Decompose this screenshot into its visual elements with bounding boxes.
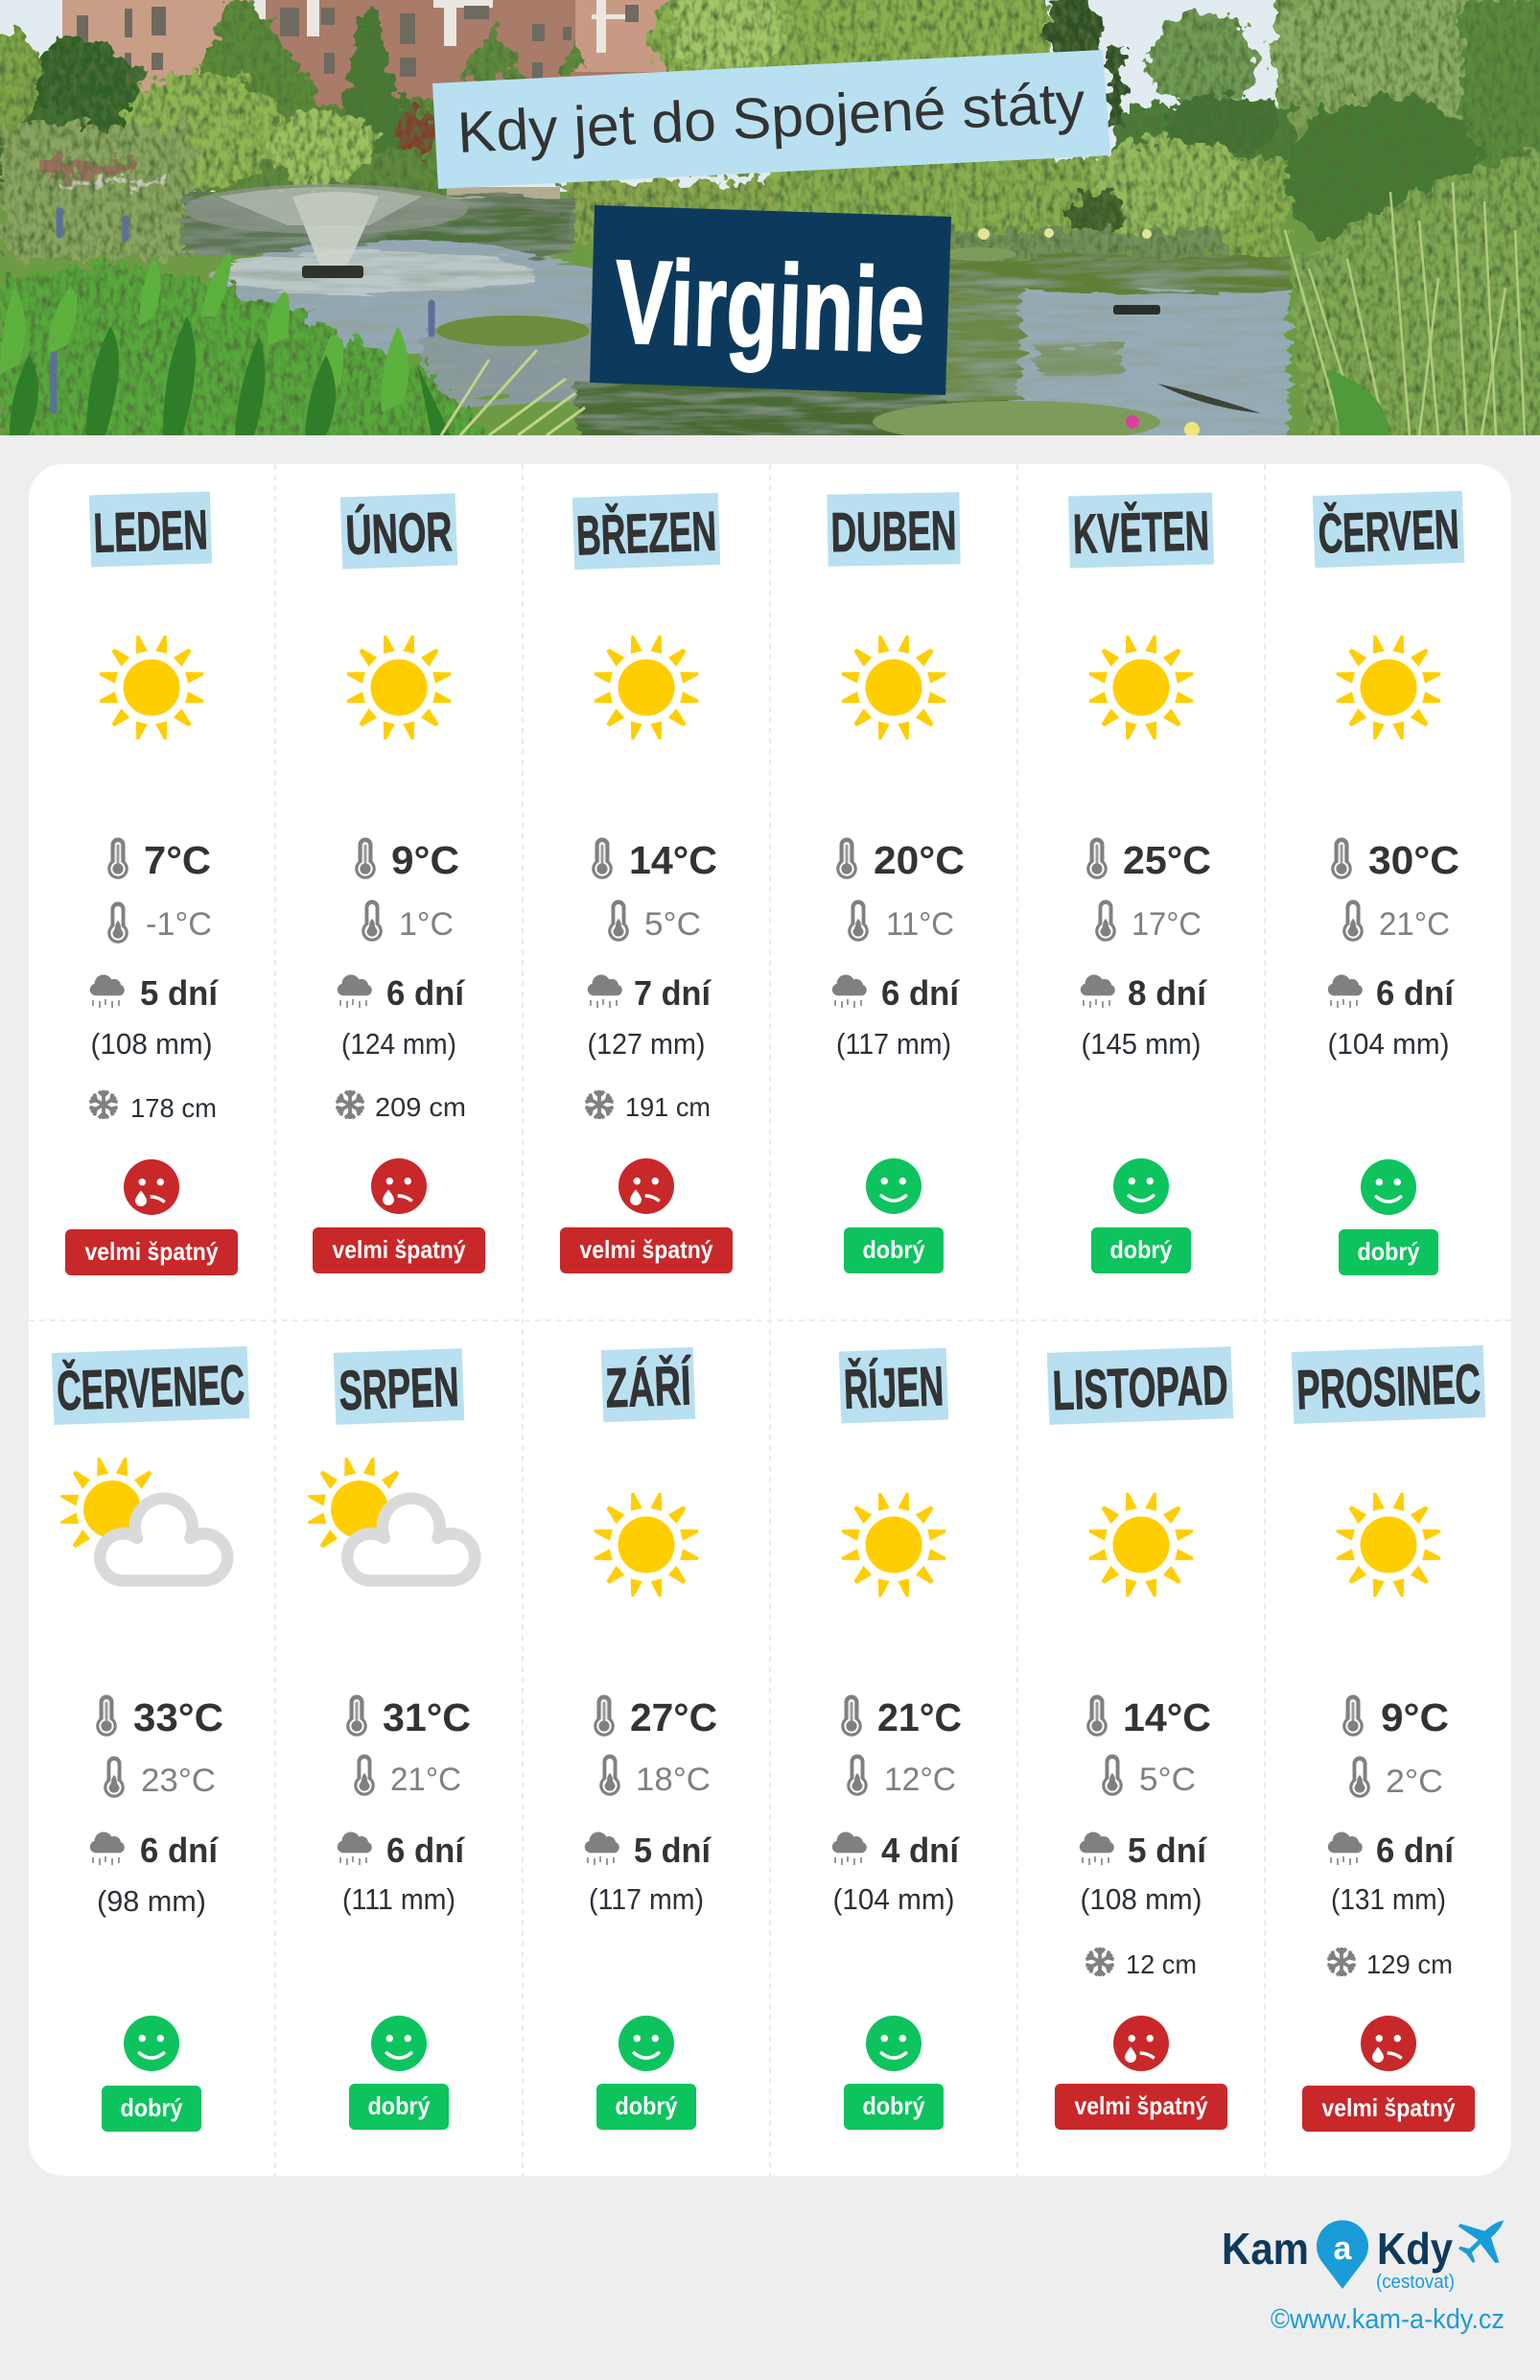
logo: Kam a Kdy: Kam xyxy=(1222,2224,1309,2274)
high temperature: 30°C xyxy=(1368,838,1459,882)
month: říjen xyxy=(832,1348,962,2130)
rating badge: dobrý xyxy=(1358,1237,1420,1266)
snowfall xyxy=(585,1090,711,1122)
month: leden xyxy=(65,492,238,1275)
month label: ČERVENEC xyxy=(56,1354,245,1422)
low temperature xyxy=(1342,899,1450,943)
icon: happy face xyxy=(371,2016,427,2071)
title banner: Kdy jet do Spojené státy xyxy=(455,70,1086,165)
low temperature xyxy=(1349,1757,1443,1800)
calendar panel xyxy=(29,464,1511,2176)
icon: sad face xyxy=(1361,2016,1416,2071)
low temperature: 21°C xyxy=(1379,906,1450,943)
low temperature: -1°C xyxy=(146,906,212,943)
month label xyxy=(601,1347,695,1422)
precipitation: (124 mm) xyxy=(341,1027,456,1061)
high temperature: 20°C xyxy=(874,838,965,882)
rainy days: 5 dní xyxy=(1128,1831,1207,1870)
high temperature: 27°C xyxy=(630,1695,717,1739)
rainy days xyxy=(90,973,219,1013)
snowfall: 191 cm xyxy=(625,1092,711,1122)
high temperature xyxy=(355,838,459,882)
high temperature: 9°C xyxy=(391,838,459,882)
rainy days xyxy=(338,973,465,1013)
low temperature: 5°C xyxy=(644,906,701,943)
month label xyxy=(340,493,457,570)
icon: sun xyxy=(1337,1493,1440,1597)
high temperature xyxy=(1086,1695,1211,1739)
rainy days xyxy=(1081,973,1207,1013)
pond water xyxy=(182,197,1290,441)
rainy days: 4 dní xyxy=(881,1831,960,1870)
rainy days: 5 dní xyxy=(634,1831,712,1870)
header photo: pond with fountains in a park xyxy=(0,0,1540,443)
rating badge xyxy=(844,2084,944,2130)
rainy days xyxy=(1080,1831,1207,1870)
month label: LISTOPAD xyxy=(1052,1354,1229,1422)
website credit: ©www.kam-a-kdy.cz xyxy=(1271,2304,1505,2335)
precipitation: (117 mm) xyxy=(589,1882,704,1916)
rating badge: dobrý xyxy=(616,2091,678,2120)
low temperature xyxy=(848,899,954,943)
month label xyxy=(89,492,212,567)
rating badge xyxy=(65,1229,238,1275)
icon: happy face xyxy=(1113,1158,1169,1214)
precipitation: (108 mm) xyxy=(1080,1882,1202,1916)
rating badge xyxy=(313,1227,485,1273)
month: září xyxy=(585,1347,717,2130)
low temperature xyxy=(599,1755,711,1798)
high temperature: 25°C xyxy=(1123,838,1211,882)
high temperature: 14°C xyxy=(1123,1695,1211,1739)
icon: sad face xyxy=(1113,2016,1169,2071)
icon: sun xyxy=(1337,636,1440,739)
rating badge xyxy=(1055,2084,1227,2130)
high temperature xyxy=(346,1695,471,1739)
rating badge xyxy=(844,1227,944,1273)
high temperature xyxy=(592,838,717,882)
month: květen xyxy=(1068,493,1214,1273)
icon: map pin: a xyxy=(1334,2230,1353,2267)
rainy days xyxy=(832,1831,960,1870)
month label: DUBEN xyxy=(830,500,957,564)
precipitation: (104 mm) xyxy=(1327,1027,1450,1061)
snowfall: 12 cm xyxy=(1126,1949,1197,1979)
rainy days: 6 dní xyxy=(1376,1831,1455,1870)
high temperature xyxy=(1331,838,1459,882)
month label: BŘEZEN xyxy=(575,500,717,568)
low temperature: 23°C xyxy=(141,1762,216,1799)
rainy days: 6 dní xyxy=(1376,973,1455,1013)
icon: sun xyxy=(595,636,698,739)
logo: Kam a Kdy: (cestovat) xyxy=(1376,2272,1455,2293)
rating badge: dobrý xyxy=(1110,1235,1173,1264)
month label xyxy=(827,492,961,567)
rainy days xyxy=(588,973,712,1013)
month label xyxy=(1068,493,1214,568)
rating badge: velmi špatný xyxy=(579,1235,713,1264)
rating badge: dobrý xyxy=(863,2091,925,2120)
high temperature: 33°C xyxy=(133,1695,223,1739)
rating badge: dobrý xyxy=(863,1235,925,1264)
blue flower spikes xyxy=(54,211,432,410)
high temperature xyxy=(836,838,965,882)
icon: sun xyxy=(100,636,203,739)
icon: happy face xyxy=(618,2016,674,2071)
high temperature xyxy=(1342,1695,1449,1739)
high temperature: 31°C xyxy=(383,1695,471,1739)
precipitation: (127 mm) xyxy=(587,1027,706,1061)
title banner xyxy=(432,50,1110,189)
month: červenec xyxy=(52,1346,249,2132)
month: listopad xyxy=(1047,1346,1233,2130)
low temperature: 11°C xyxy=(886,906,954,943)
rating badge: dobrý xyxy=(121,2093,183,2122)
logo: Kam a Kdy: Kdy xyxy=(1377,2224,1453,2274)
low temperature: 21°C xyxy=(390,1762,461,1798)
rating badge xyxy=(102,2086,201,2132)
precipitation: (98 mm) xyxy=(97,1884,206,1918)
low temperature: 17°C xyxy=(1132,906,1202,943)
snowfall xyxy=(89,1090,217,1123)
high temperature: 21°C xyxy=(877,1695,962,1739)
month label: ÚNOR xyxy=(344,501,454,567)
low temperature xyxy=(847,1755,956,1798)
month label xyxy=(334,1348,464,1425)
icon: airplane xyxy=(1458,2220,1504,2263)
high temperature xyxy=(594,1695,717,1739)
rating badge: velmi špatný xyxy=(332,1235,466,1264)
month label xyxy=(839,1348,948,1423)
rating badge xyxy=(596,2084,696,2130)
rainy days xyxy=(585,1831,712,1870)
rating badge xyxy=(560,1227,733,1273)
icon: sun xyxy=(842,1493,945,1597)
month: prosinec xyxy=(1292,1345,1485,2132)
high temperature: 7°C xyxy=(144,838,211,882)
destination name banner: Virginie xyxy=(613,236,926,378)
rating badge xyxy=(1339,1229,1438,1275)
month: srpen xyxy=(308,1348,475,2130)
icon: happy face xyxy=(124,2016,179,2071)
snowfall: 178 cm xyxy=(130,1093,217,1123)
month: únor xyxy=(313,493,485,1273)
low temperature xyxy=(104,1757,216,1799)
icon: sun xyxy=(1089,1493,1193,1597)
low temperature xyxy=(354,1755,461,1798)
background foliage xyxy=(0,0,1540,261)
rating badge xyxy=(1302,2086,1475,2132)
high temperature xyxy=(96,1695,223,1739)
month label: LEDEN xyxy=(93,499,209,565)
month label: KVĚTEN xyxy=(1072,500,1210,566)
month label xyxy=(1313,491,1464,568)
high temperature: 14°C xyxy=(629,838,717,882)
month label: ŘÍJEN xyxy=(843,1355,945,1421)
rating badge: velmi špatný xyxy=(1321,2093,1456,2122)
icon: sun xyxy=(595,1493,698,1597)
rating badge: velmi špatný xyxy=(1074,2091,1208,2120)
low temperature: 12°C xyxy=(884,1762,956,1798)
snowfall xyxy=(336,1090,466,1122)
low temperature: 5°C xyxy=(1139,1762,1196,1798)
high temperature xyxy=(1086,838,1211,882)
snowfall: 209 cm xyxy=(375,1092,466,1122)
rainy days: 8 dní xyxy=(1128,973,1207,1013)
foreground vegetation xyxy=(0,144,1540,441)
rainy days: 7 dní xyxy=(634,973,712,1013)
month label: SRPEN xyxy=(338,1356,460,1422)
rainy days: 6 dní xyxy=(386,1831,465,1870)
month label xyxy=(572,493,720,570)
rainy days xyxy=(90,1831,219,1870)
precipitation: (145 mm) xyxy=(1082,1027,1201,1061)
precipitation: (111 mm) xyxy=(342,1882,455,1916)
low temperature xyxy=(1095,899,1202,943)
month: březen xyxy=(560,493,733,1273)
low temperature xyxy=(107,901,212,944)
fountain spray xyxy=(184,184,1261,413)
rating badge xyxy=(349,2084,449,2130)
rainy days: 6 dní xyxy=(140,1831,219,1870)
snowfall xyxy=(1327,1948,1453,1979)
low temperature: 18°C xyxy=(636,1762,711,1798)
icon: sad face xyxy=(618,1158,674,1214)
rainy days xyxy=(1328,973,1455,1013)
snowfall xyxy=(1085,1948,1197,1979)
icon: happy face xyxy=(866,2016,922,2071)
rainy days xyxy=(832,973,960,1013)
icon: sun xyxy=(1089,636,1193,739)
destination name banner xyxy=(590,205,951,395)
icon: sad face xyxy=(371,1158,427,1214)
low temperature xyxy=(362,899,454,943)
rainy days xyxy=(1328,1831,1455,1870)
icon: happy face xyxy=(866,1158,922,1214)
icon: partly cloudy xyxy=(60,1458,227,1580)
icon: sun xyxy=(347,636,451,739)
month: červen xyxy=(1313,491,1464,1275)
low temperature xyxy=(608,899,701,943)
rating badge xyxy=(1091,1227,1191,1273)
rating badge: velmi špatný xyxy=(84,1237,219,1266)
low temperature: 2°C xyxy=(1386,1763,1443,1800)
low temperature: 1°C xyxy=(399,906,454,943)
lily pads and flowers xyxy=(436,228,1200,435)
precipitation: (104 mm) xyxy=(832,1882,955,1916)
icon: map pin xyxy=(1317,2220,1368,2289)
month label: ZÁŘÍ xyxy=(604,1354,693,1420)
high temperature: 9°C xyxy=(1381,1695,1449,1739)
rainy days: 6 dní xyxy=(881,973,960,1013)
month: duben xyxy=(827,492,965,1273)
logo: Kam a Kdy xyxy=(1222,2220,1504,2293)
precipitation: (117 mm) xyxy=(836,1027,951,1061)
rating badge: dobrý xyxy=(368,2091,431,2120)
icon: sad face xyxy=(124,1159,179,1215)
precipitation: (131 mm) xyxy=(1331,1882,1446,1916)
snowfall: 129 cm xyxy=(1366,1949,1453,1979)
month label xyxy=(52,1346,249,1425)
precipitation: (108 mm) xyxy=(90,1027,213,1061)
month label xyxy=(1047,1346,1233,1425)
icon: partly cloudy xyxy=(308,1458,475,1580)
high temperature xyxy=(107,838,211,882)
high temperature xyxy=(841,1695,962,1739)
rainy days xyxy=(338,1831,465,1870)
icon: happy face xyxy=(1361,1159,1416,1215)
low temperature xyxy=(1102,1755,1196,1798)
rainy days: 5 dní xyxy=(140,973,219,1013)
rainy days: 6 dní xyxy=(386,973,465,1013)
icon: sun xyxy=(842,636,945,739)
